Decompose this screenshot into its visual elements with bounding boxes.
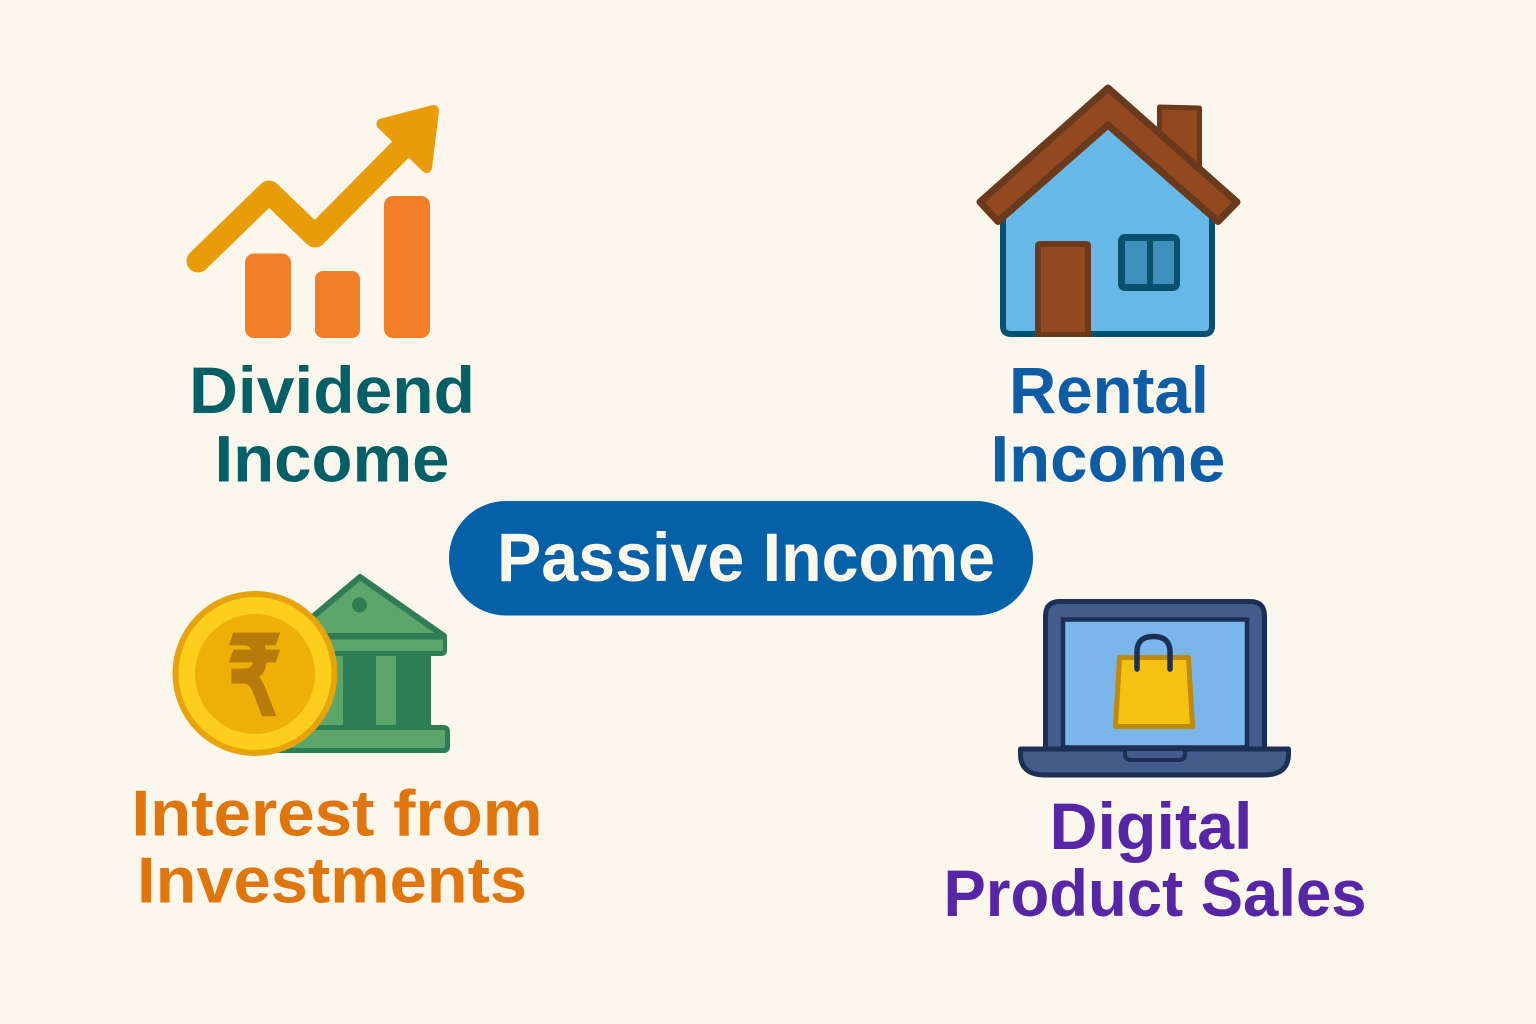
heading: Interest from Investments <box>132 776 542 916</box>
icon: dividend growth chart <box>198 110 434 338</box>
icon: shopping bag <box>1116 636 1192 726</box>
icon: rupee symbol: ₹ <box>228 618 280 736</box>
heading: Rental Income <box>990 353 1226 496</box>
heading: Digital Product Sales <box>944 789 1366 930</box>
heading: Dividend Income: Income <box>214 422 450 496</box>
heading: Rental Income: Rental <box>1009 353 1209 427</box>
heading: Rental Income: Income <box>990 422 1226 496</box>
heading: Digital Product Sales: Digital <box>1050 789 1252 863</box>
heading: Interest from Investments: Investments <box>137 844 527 916</box>
heading: Dividend Income: Dividend <box>189 353 475 427</box>
central pill: Passive Income <box>449 501 1033 616</box>
central pill: Passive Income: Passive Income <box>497 519 995 596</box>
icon: bank with rupee coin <box>176 577 450 753</box>
heading: Digital Product Sales: Product Sales <box>944 856 1366 930</box>
icon: house <box>980 88 1237 337</box>
heading: Interest from Investments: Interest from <box>132 776 542 850</box>
icon: laptop with shopping bag <box>1020 602 1288 775</box>
heading: Dividend Income <box>189 353 475 496</box>
